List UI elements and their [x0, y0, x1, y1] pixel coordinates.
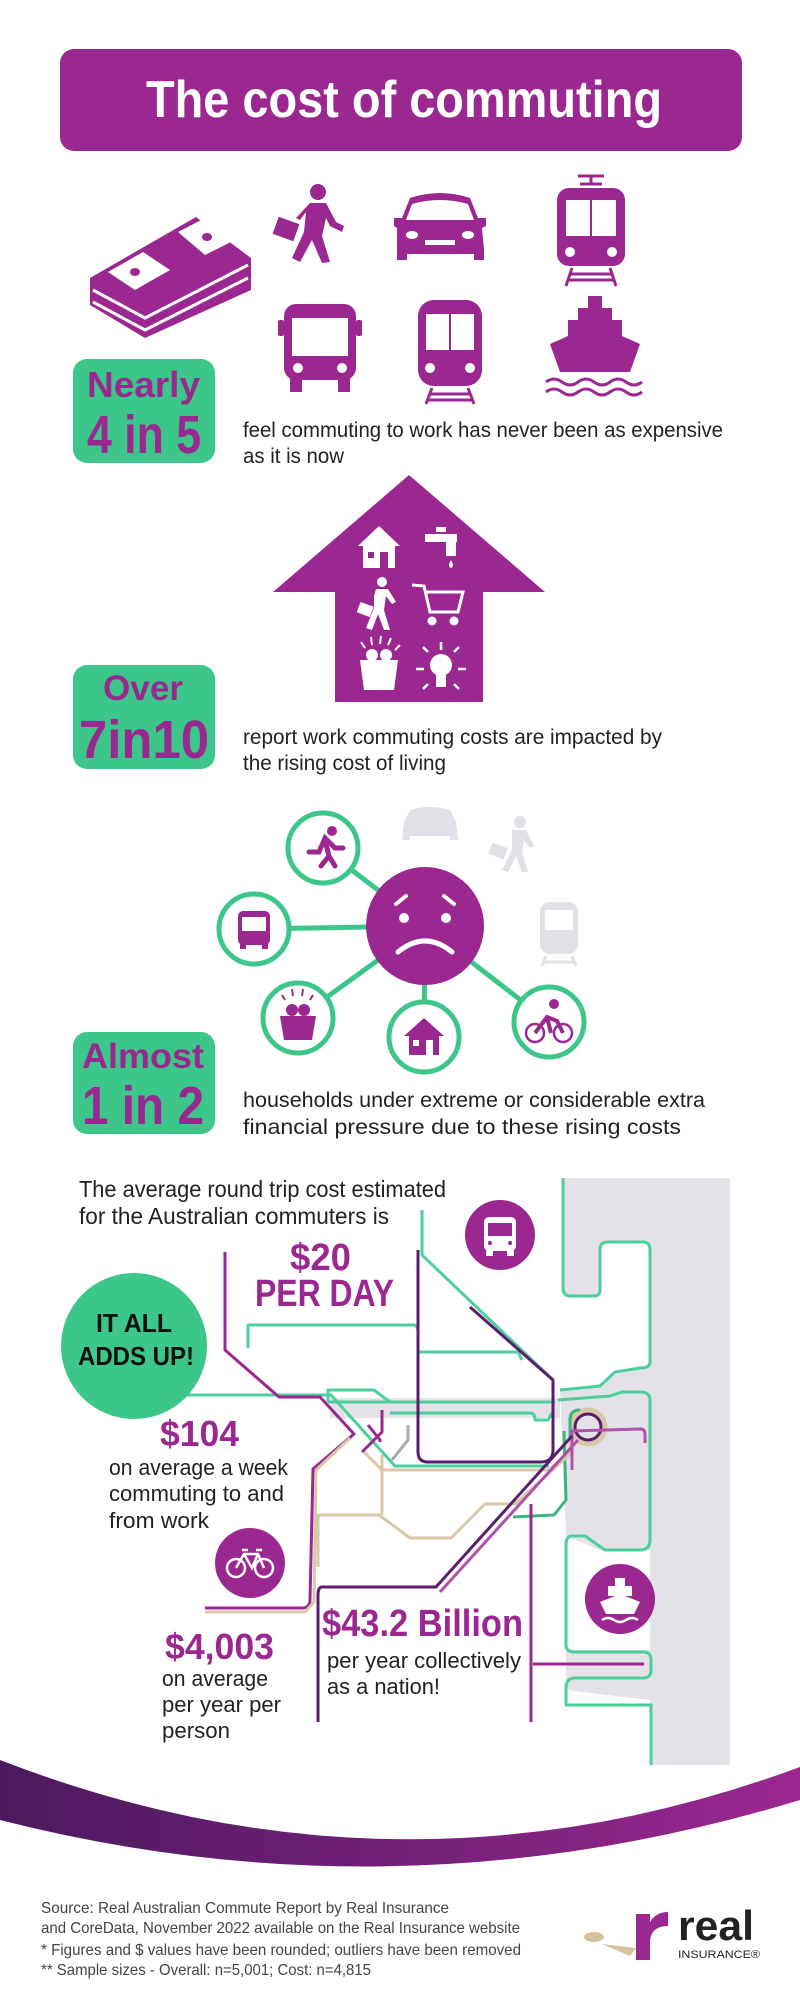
callout: $20 per day: PER DAY [255, 1273, 394, 1315]
icon: faded train [540, 902, 578, 966]
stat: $104 per week: $104 [160, 1413, 239, 1454]
stat box: nearly 4 in 5: Nearly [87, 364, 200, 405]
logo: real insurance: INSURANCE® [678, 1949, 760, 1961]
stat box: over 7 in 10 [73, 665, 215, 770]
icon: ship circle [585, 1564, 655, 1634]
icon: tram [557, 176, 625, 286]
arrow: rising cost of living [273, 475, 545, 702]
stat box: nearly 4 in 5 [73, 359, 215, 465]
text: 4 in 5 description [243, 419, 723, 468]
stat: $4,003 per year: per year per [162, 1692, 281, 1717]
logo: real insurance: real [678, 1902, 754, 1949]
stat box: almost 1 in 2 [73, 1032, 215, 1136]
text: 4 in 5 description: as it is now [243, 445, 345, 468]
stat: $43.2 billion: $43.2 Billion [322, 1603, 523, 1645]
icon: cyclist circle [514, 987, 584, 1057]
source text: ** Sample sizes - Overall: n=5,001; Cost: n=4,815 [41, 1962, 371, 1979]
icon: money stack [90, 217, 251, 338]
icon: bike circle [215, 1528, 285, 1598]
stat: $43.2 billion: per year collectively [327, 1648, 521, 1673]
icon: walker white [357, 577, 396, 630]
stat: $43.2 billion: as a nation! [327, 1674, 440, 1699]
source text: Source: Real Australian Commute Report by Real Insurance [41, 1900, 449, 1917]
logo: real insurance [584, 1902, 760, 1961]
callout: it all adds up: IT ALL [96, 1308, 172, 1338]
text: 7 in 10 description: the rising cost of living [243, 752, 446, 775]
text: 1 in 2 description: households under extreme or considerable extra [243, 1089, 705, 1112]
callout: it all adds up [61, 1273, 207, 1419]
text: average round trip [79, 1176, 446, 1229]
title: The cost of commuting [146, 71, 662, 129]
text: 1 in 2 description: financial pressure due to these rising costs [243, 1116, 681, 1139]
stat box: over 7 in 10: Over [103, 669, 183, 708]
source text: * Figures and $ values have been rounded; outliers have been removed [41, 1942, 521, 1959]
stat: $104 per week: commuting to and [109, 1481, 284, 1506]
icon: house [358, 526, 400, 568]
icon: train [418, 300, 482, 404]
text: average round trip: for the Australian commuters is [79, 1203, 389, 1229]
text: average round trip: The average round trip cost estimated [79, 1176, 446, 1202]
text: 7 in 10 description: report work commuting costs are impacted by [243, 726, 662, 749]
icon: runner circle [288, 813, 358, 883]
icon: bus [278, 304, 362, 392]
icon: basket circle [263, 983, 333, 1053]
icon: house circle [389, 1002, 459, 1072]
stat: $104 per week: from work [109, 1508, 210, 1533]
icon: faded car [402, 807, 458, 840]
icon: walker [273, 184, 344, 263]
icon: car [394, 193, 486, 260]
icon: cart [412, 585, 463, 624]
stat box: almost 1 in 2: 1 in 2 [82, 1076, 204, 1136]
icon: ship [546, 296, 642, 395]
icon: bus map circle [465, 1200, 535, 1270]
stat box: nearly 4 in 5: 4 in 5 [87, 405, 201, 465]
title [60, 49, 742, 151]
icon: sad face [366, 867, 484, 985]
network: financial pressure [219, 807, 584, 1072]
stat box: over 7 in 10: 7in10 [79, 710, 209, 770]
callout: $20 per day: $20 [290, 1237, 351, 1279]
icon: tap [425, 527, 457, 568]
icon: bulb [416, 642, 466, 689]
text: 1 in 2 description [243, 1089, 705, 1139]
callout: it all adds up: ADDS UP! [78, 1341, 194, 1371]
text: 4 in 5 description: feel commuting to work has never been as expensive [243, 419, 723, 442]
stat box: almost 1 in 2: Almost [82, 1037, 204, 1076]
callout: $20 per day [255, 1237, 394, 1315]
icon: basket [360, 636, 400, 690]
stat: $104 per week [109, 1413, 289, 1533]
stat: $104 per week: on average a week [109, 1455, 289, 1480]
text: 7 in 10 description [243, 726, 662, 775]
map: commute route lines [187, 1178, 730, 1765]
stat: $4,003 per year [162, 1626, 281, 1743]
stat: $43.2 billion [322, 1603, 523, 1699]
swoosh band [0, 1760, 800, 1866]
stat: $4,003 per year: on average [162, 1666, 268, 1691]
stat: $4,003 per year: $4,003 [165, 1626, 274, 1667]
stat: $4,003 per year: person [162, 1718, 230, 1743]
icon: faded walker [488, 816, 534, 872]
icon: bus circle [219, 894, 289, 964]
source text [41, 1900, 521, 1979]
source text: and CoreData, November 2022 available on the Real Insurance website [41, 1920, 520, 1937]
